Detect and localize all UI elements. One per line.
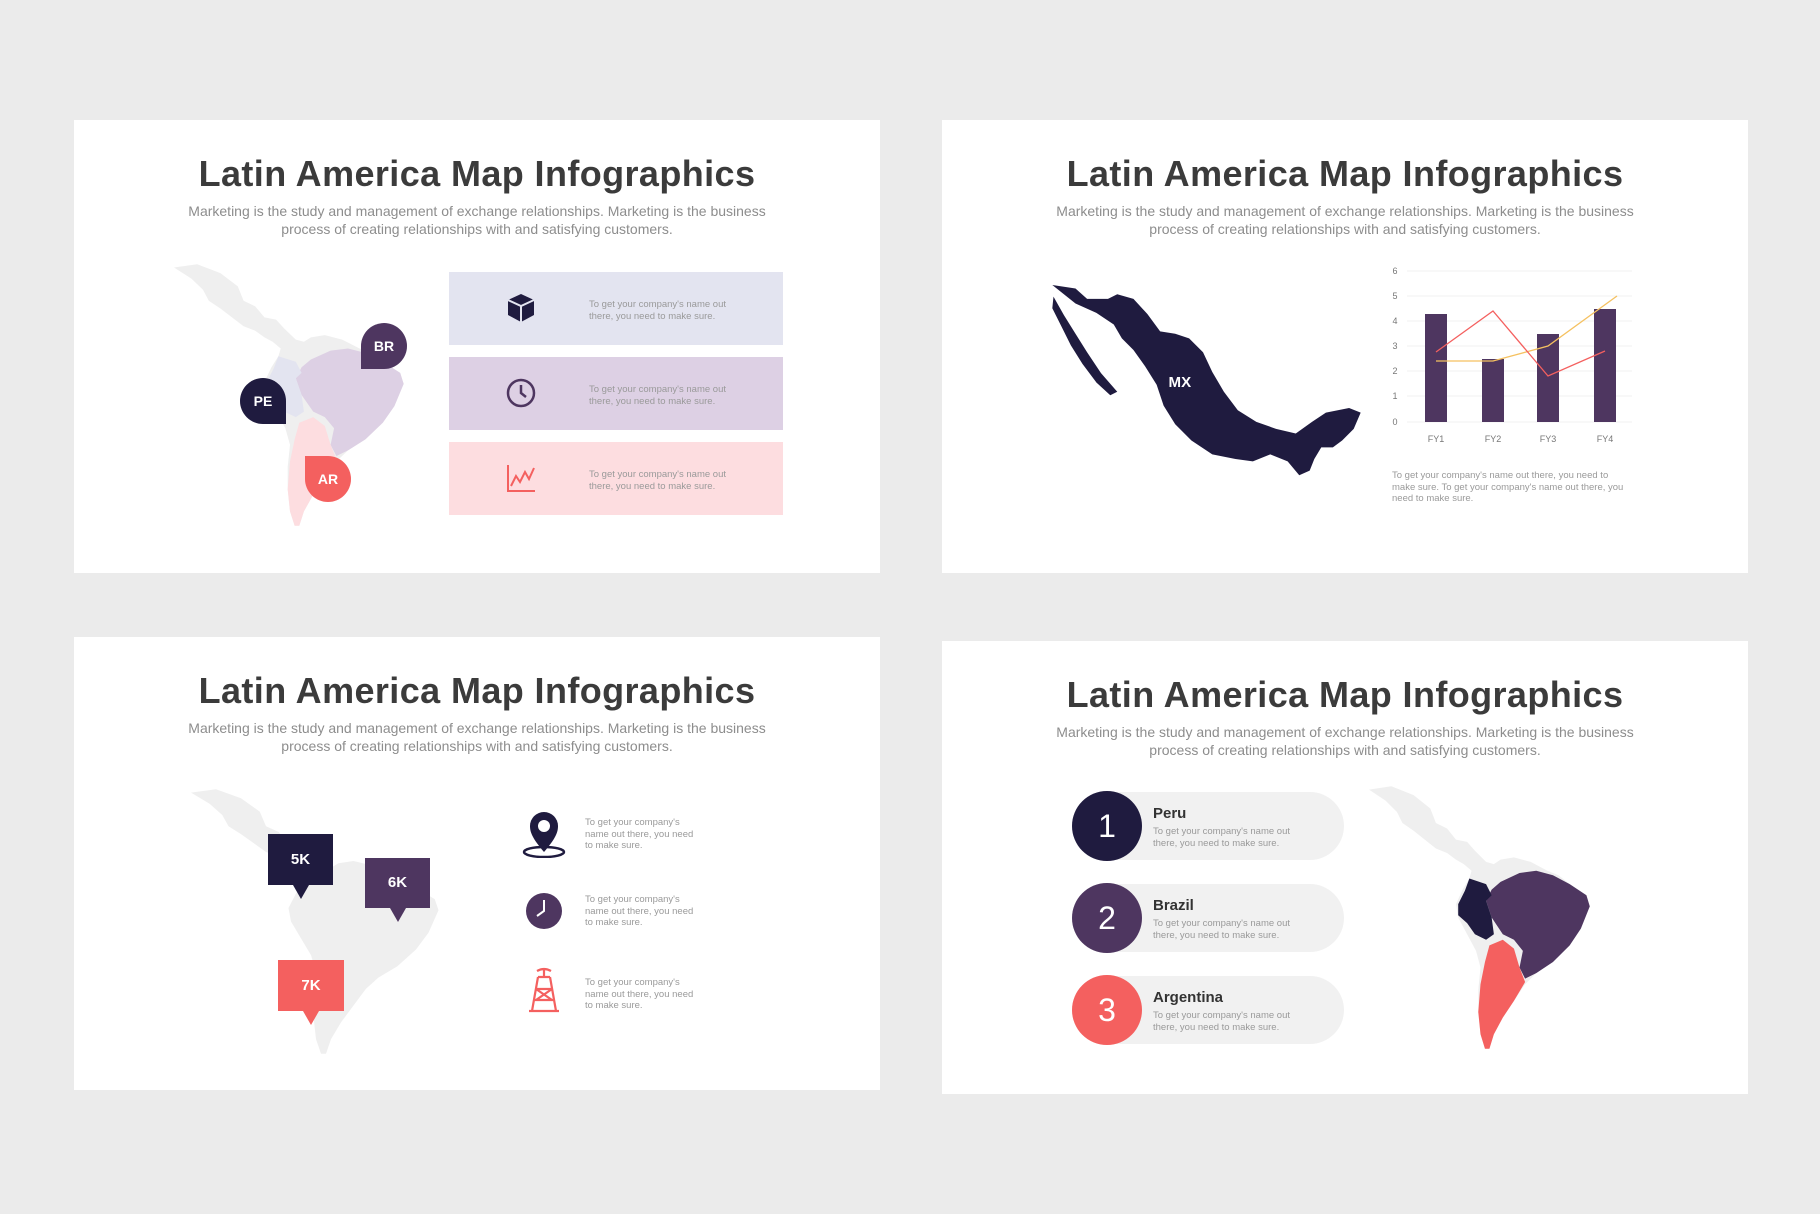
item 3: Argentina: To get your company's name out: [1153, 1010, 1290, 1021]
bubble: PE: PE: [254, 393, 272, 409]
bar and line chart: 3: [1392, 341, 1398, 351]
bar and line chart: 1: [1392, 391, 1398, 401]
icon: clock: [526, 893, 562, 929]
panel: top-right mexico chart: [942, 120, 1748, 573]
icon: clock: [506, 378, 536, 408]
text 1: to make sure.: [585, 840, 643, 851]
map: latin america with highlighted countries: [174, 264, 404, 526]
bar and line chart: FY1: [1428, 434, 1444, 444]
panel: top-left bubbles map: [74, 120, 880, 573]
bar and line chart: FY2: [1485, 434, 1501, 444]
subtitle: process of creating relationships with and satisfying customers.: [1149, 221, 1541, 237]
text: [589, 384, 726, 406]
item 2: Brazil: To get your company's name out: [1153, 918, 1290, 929]
text 1: name out there, you need: [585, 828, 693, 840]
icon: oil tower: [529, 968, 559, 1012]
text 2: name out there, you need: [585, 906, 693, 916]
title: Latin America Map Infographics: [1067, 674, 1623, 715]
marker: 7K: [278, 960, 344, 1025]
row 1: box icon: [449, 272, 783, 345]
text: [589, 299, 726, 322]
subtitle: process of creating relationships with and satisfying customers.: [1149, 742, 1541, 758]
title: Latin America Map Infographics: [1067, 153, 1623, 194]
bar and line chart: FY3: [1540, 434, 1556, 444]
bar and line chart: [1392, 266, 1632, 444]
bubble: BR: BR: [374, 338, 394, 354]
row 3: chart icon: [449, 442, 783, 515]
subtitle: Marketing is the study and management of exchange relationships. Marketing is the business: [188, 203, 766, 219]
icon: location pin: [522, 812, 566, 858]
marker: 6K: 6K: [388, 874, 407, 891]
item 2: Brazil: 2: [1098, 900, 1116, 936]
marker: 5K: 5K: [291, 851, 310, 868]
subtitle: [188, 203, 766, 237]
map: mexico: MX: [1169, 374, 1191, 391]
item 1: Peru: Peru: [1153, 805, 1186, 822]
chart caption: To get your company's name out there, you need to make sure. To get your company's name out there, you need to make sure.: [1392, 470, 1623, 504]
subtitle: process of creating relationships with and satisfying customers.: [281, 221, 673, 237]
row 2: clock icon: [449, 357, 783, 430]
item 2: Brazil: there, you need to make sure.: [1153, 930, 1279, 940]
bar and line chart: 4: [1392, 316, 1398, 326]
bar and line chart: 0: [1392, 417, 1398, 427]
subtitle: Marketing is the study and management of exchange relationships. Marketing is the business: [1056, 203, 1634, 219]
bar and line chart: 5: [1392, 291, 1398, 301]
title: Latin America Map Infographics: [199, 670, 755, 711]
text 3: to make sure.: [585, 1000, 643, 1011]
item 3: Argentina: there, you need to make sure.: [1153, 1022, 1279, 1032]
item 1: Peru: [1072, 792, 1344, 860]
text 3: To get your company's: [585, 977, 680, 988]
map: latin america grey: [192, 790, 438, 1054]
text: there, you need to make sure.: [589, 310, 715, 322]
text: [589, 469, 726, 492]
item 1: Peru: there, you need to make sure.: [1153, 838, 1279, 848]
text: there, you need to make sure.: [589, 480, 715, 492]
bubble: PE: [240, 378, 286, 424]
bubble: AR: [305, 456, 351, 502]
bar and line chart: FY4: [1597, 434, 1613, 444]
bar and line chart: 2: [1392, 366, 1398, 376]
text: To get your company's name out: [589, 384, 726, 395]
map: latin america with ranked countries: [1370, 786, 1590, 1049]
text 3: name out there, you need: [585, 988, 693, 1000]
text 2: [585, 894, 693, 928]
marker: 5K: [268, 834, 333, 899]
subtitle: [1056, 203, 1634, 237]
text 2: to make sure.: [585, 917, 643, 928]
item 1: Peru: To get your company's name out: [1153, 826, 1290, 837]
subtitle: process of creating relationships with and satisfying customers.: [281, 738, 673, 754]
item 1: Peru: 1: [1098, 808, 1116, 844]
item 3: Argentina: Argentina: [1153, 989, 1223, 1006]
text: To get your company's name out: [589, 299, 726, 310]
icon: line chart: [507, 465, 535, 492]
text 3: [585, 977, 693, 1011]
subtitle: [1056, 724, 1634, 758]
subtitle: Marketing is the study and management of exchange relationships. Marketing is the business: [188, 720, 766, 736]
item 3: Argentina: 3: [1098, 992, 1116, 1028]
item 3: Argentina: [1072, 976, 1344, 1044]
text 2: To get your company's: [585, 894, 680, 905]
text: there, you need to make sure.: [589, 396, 715, 406]
panel: bottom-left value markers: [74, 637, 880, 1090]
marker: 6K: [365, 858, 430, 922]
subtitle: Marketing is the study and management of exchange relationships. Marketing is the business: [1056, 724, 1634, 740]
title: Latin America Map Infographics: [199, 153, 755, 194]
item 2: Brazil: Brazil: [1153, 897, 1194, 914]
panel: bottom-right ranked countries: [942, 641, 1748, 1094]
text 1: To get your company's: [585, 817, 680, 828]
bubble: AR: AR: [318, 471, 338, 487]
bar and line chart: 6: [1392, 266, 1398, 276]
marker: 7K: 7K: [301, 977, 321, 994]
subtitle: [188, 720, 766, 754]
text: To get your company's name out: [589, 469, 726, 480]
item 2: Brazil: [1072, 884, 1344, 952]
map: mexico: [1052, 285, 1361, 476]
icon: box: [508, 294, 534, 322]
text 1: [585, 817, 693, 851]
bubble: BR: [361, 323, 407, 369]
